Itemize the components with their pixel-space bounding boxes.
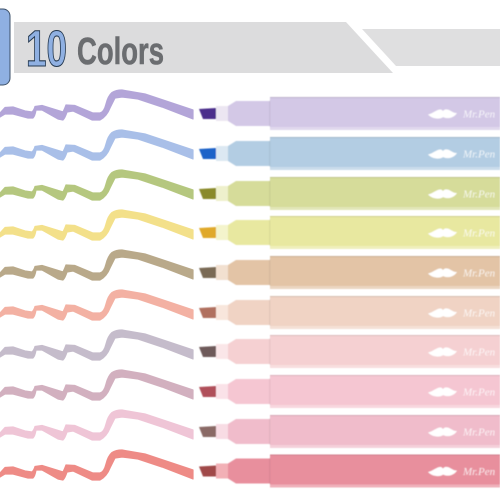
- title: 10 Colors: Colors: [77, 31, 164, 73]
- marker 1: purple: Mr.Pen: [462, 108, 496, 120]
- marker 3: green: [199, 177, 500, 210]
- blue side tab: [0, 9, 10, 85]
- marker 10: coral: [199, 454, 500, 488]
- marker 7: light pink: Mr.Pen: [462, 346, 496, 358]
- marker 7: light pink: [199, 335, 500, 368]
- marker 3: green: Mr.Pen: [462, 188, 496, 200]
- ink swatch strokes: [0, 90, 193, 480]
- marker 6: peach: [199, 296, 500, 329]
- marker 5: tan: Mr.Pen: [462, 268, 496, 280]
- marker 10: coral: Mr.Pen: [462, 466, 496, 478]
- marker 6: peach: Mr.Pen: [462, 308, 496, 320]
- title: 10 Colors: 10: [26, 20, 67, 77]
- marker 4: yellow: [199, 216, 500, 249]
- marker 8: pink: [199, 375, 500, 408]
- marker 2: blue: [199, 137, 500, 170]
- marker 9: rose: [199, 415, 500, 448]
- marker 8: pink: Mr.Pen: [462, 386, 496, 398]
- marker 5: tan: [199, 256, 500, 289]
- marker 9: rose: Mr.Pen: [462, 426, 496, 438]
- header: grey banner: [14, 22, 500, 73]
- title: 10 Colors: [26, 20, 164, 77]
- marker 4: yellow: Mr.Pen: [462, 228, 496, 240]
- marker 2: blue: Mr.Pen: [462, 148, 496, 160]
- marker 1: purple: [199, 97, 500, 130]
